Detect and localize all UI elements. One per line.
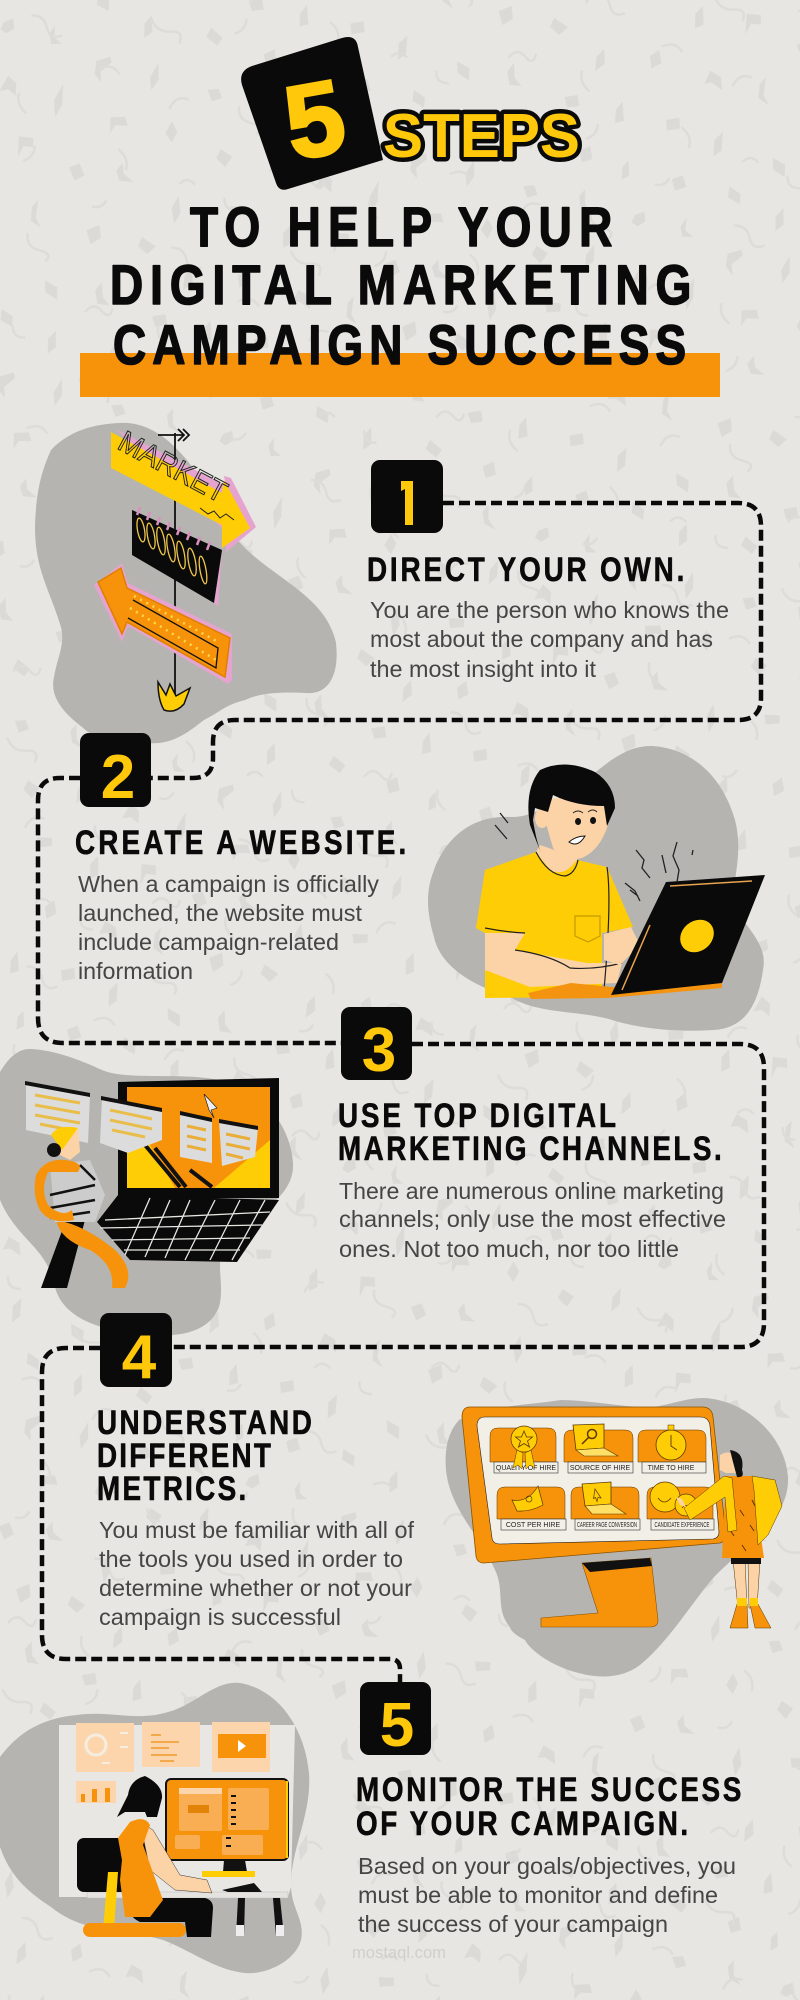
step 3 body: There are numerous online marketing — [339, 1178, 724, 1204]
title number 5 badge — [241, 37, 383, 190]
watermark: mostaql.com — [352, 1943, 446, 1962]
step 4 body: determine whether or not your — [99, 1575, 412, 1601]
yellow market arrow: MARKET — [113, 425, 232, 510]
step 1 body: most about the company and has — [370, 626, 713, 652]
step 4 heading: METRICS. — [97, 1469, 246, 1508]
number badge 4: 4 — [122, 1323, 157, 1392]
background blob: step 3 — [0, 1049, 293, 1339]
hair — [528, 764, 615, 853]
number badge 2: 2 — [101, 743, 135, 812]
step 2 body: launched, the website must — [78, 900, 363, 926]
step 5 heading: OF YOUR CAMPAIGN. — [356, 1804, 688, 1843]
chair base — [83, 1923, 186, 1937]
dashed connector: step 2 to 3 — [38, 778, 341, 1043]
keyboard — [97, 1195, 279, 1262]
step 4 body: You must be familiar with all of — [99, 1517, 415, 1543]
card: cost per hire: COST PER HIRE — [506, 1522, 560, 1529]
arm — [140, 1822, 212, 1893]
step 2 body: information — [78, 958, 193, 984]
dashed connector: step 4 to 5 — [42, 1348, 400, 1682]
number badge 1 — [371, 460, 443, 533]
step 3 body: channels; only use the most effective — [339, 1206, 726, 1232]
step 5 body — [358, 1853, 736, 1937]
step 2 heading: CREATE A WEBSITE. — [75, 823, 406, 862]
floating panel 3 — [180, 1111, 212, 1163]
card: career page conversion: CAREER PAGE CONVERSION — [577, 1522, 637, 1529]
desk — [87, 1892, 288, 1898]
face details — [575, 817, 596, 825]
person — [35, 1127, 128, 1288]
arm — [485, 933, 622, 987]
step 3 heading — [338, 1096, 722, 1168]
step 4 body: campaign is successful — [99, 1604, 341, 1630]
illustration: woman at desktop monitor — [59, 1722, 295, 1937]
card: time to hire — [638, 1425, 706, 1473]
number badge 5: 5 — [380, 1691, 414, 1760]
illustration: boy using laptop — [476, 764, 765, 999]
ear — [535, 808, 549, 828]
t-shirt — [476, 852, 633, 998]
sign pole — [158, 429, 189, 697]
monitor — [166, 1779, 288, 1860]
monitor stand — [541, 1558, 658, 1627]
step 2 body: include campaign-related — [78, 929, 339, 955]
title — [80, 37, 720, 397]
pocket — [575, 916, 600, 942]
streaks — [145, 1145, 212, 1187]
laptop — [611, 875, 765, 995]
step 1 block — [367, 460, 729, 682]
chair — [77, 1838, 150, 1892]
laptop screen — [118, 1078, 279, 1198]
orange highlight bar — [80, 353, 720, 397]
wall panel: gear — [76, 1723, 134, 1772]
right forearm — [604, 927, 640, 965]
number badge 1: 1 — [406, 524, 408, 526]
step 3 body — [339, 1178, 726, 1262]
wall panel: text — [142, 1722, 200, 1767]
number badge 3: 3 — [362, 1016, 396, 1085]
card: quality of hire — [490, 1426, 558, 1473]
monitor screen — [477, 1417, 719, 1544]
card: candidate experience — [647, 1482, 714, 1530]
card: cost per hire — [497, 1486, 566, 1530]
card: career page conversion — [571, 1482, 640, 1530]
background blob: step 4 — [446, 1398, 788, 1676]
step 3 heading: MARKETING CHANNELS. — [338, 1129, 722, 1168]
step 5 block — [352, 1682, 741, 1962]
presenter woman — [676, 1450, 782, 1628]
wall panel: bar chart — [76, 1781, 116, 1803]
monitor stand — [223, 1860, 247, 1872]
step 4 body: the tools you used in order to — [99, 1546, 403, 1572]
step 1 body: the most insight into it — [370, 656, 597, 682]
title word STEPS: STEPS — [383, 102, 580, 171]
yellow flame — [158, 682, 190, 711]
laptop logo — [674, 913, 720, 959]
step 4 heading: DIFFERENT — [97, 1436, 271, 1475]
face — [545, 798, 608, 859]
step 1 heading: DIRECT YOUR OWN. — [367, 550, 684, 589]
number badge 4 — [100, 1313, 172, 1392]
number badge 2 — [80, 733, 151, 812]
yellow market arrow — [111, 425, 256, 552]
keyboard base — [528, 983, 722, 999]
black sign with pink hatching — [132, 507, 222, 606]
step 4 heading: UNDERSTAND — [97, 1403, 312, 1442]
number badge 5 — [360, 1682, 431, 1760]
step 1 body: You are the person who knows the — [370, 597, 729, 623]
step 2 block — [75, 733, 406, 984]
illustration: dashboard monitor with presenter — [462, 1407, 782, 1628]
dashed connector: step 1 to 2 — [151, 503, 761, 778]
step 4 block — [97, 1313, 415, 1630]
background blob: step 2 — [428, 746, 764, 1031]
card: source of hire: SOURCE OF HIRE — [570, 1465, 630, 1472]
card: time to hire: TIME TO HIRE — [648, 1465, 695, 1472]
step 3 block — [338, 1007, 726, 1262]
card: candidate experience: CANDIDATE EXPERIENCE — [654, 1522, 710, 1529]
floating panel 2 — [100, 1096, 162, 1153]
dashed connector: step 3 to 4 — [172, 1044, 764, 1347]
step 5 body: the success of your campaign — [358, 1911, 668, 1937]
step 5 body: Based on your goals/objectives, you — [358, 1853, 736, 1879]
card: source of hire — [564, 1424, 633, 1473]
desk legs — [236, 1898, 284, 1936]
torso — [118, 1819, 163, 1917]
title line 2: DIGITAL MARKETING — [110, 254, 691, 316]
number badge 3 — [341, 1007, 412, 1085]
title number 5 badge: 5 — [276, 58, 353, 183]
floating panel 1 — [25, 1081, 90, 1143]
monitor frame — [462, 1407, 726, 1563]
step 4 heading — [97, 1403, 312, 1508]
step 1 body — [370, 597, 729, 682]
card: quality of hire: QUALITY OF HIRE — [496, 1465, 556, 1472]
step 2 body — [78, 871, 379, 984]
step 5 heading — [356, 1770, 741, 1843]
step 3 heading: USE TOP DIGITAL — [338, 1096, 616, 1135]
laptop highlights — [622, 881, 752, 990]
title line 3: CAMPAIGN SUCCESS — [113, 314, 686, 376]
step 4 body — [99, 1517, 415, 1630]
title line 1: TO HELP YOUR — [190, 196, 612, 258]
hair — [117, 1776, 162, 1817]
motion squiggles — [495, 813, 693, 901]
wall — [59, 1725, 295, 1897]
cursor — [204, 1094, 217, 1118]
keyboard — [222, 1883, 262, 1892]
trousers — [128, 1898, 213, 1937]
illustration: woman with big laptop — [25, 1078, 279, 1288]
background blob: step 1 — [35, 423, 337, 743]
chair post — [103, 1872, 118, 1930]
step 5 heading: MONITOR THE SUCCESS — [356, 1770, 741, 1809]
step 5 body: must be able to monitor and define — [358, 1882, 718, 1908]
background blob: step 5 — [0, 1683, 309, 1973]
wall panel: video — [212, 1722, 270, 1772]
step 2 body: When a campaign is officially — [78, 871, 379, 897]
illustration: market street sign — [94, 425, 256, 711]
orange arrow with bulbs — [94, 563, 232, 684]
neck — [536, 845, 578, 872]
step 3 body: ones. Not too much, nor too little — [339, 1236, 679, 1262]
floating panel 4 — [219, 1119, 258, 1166]
